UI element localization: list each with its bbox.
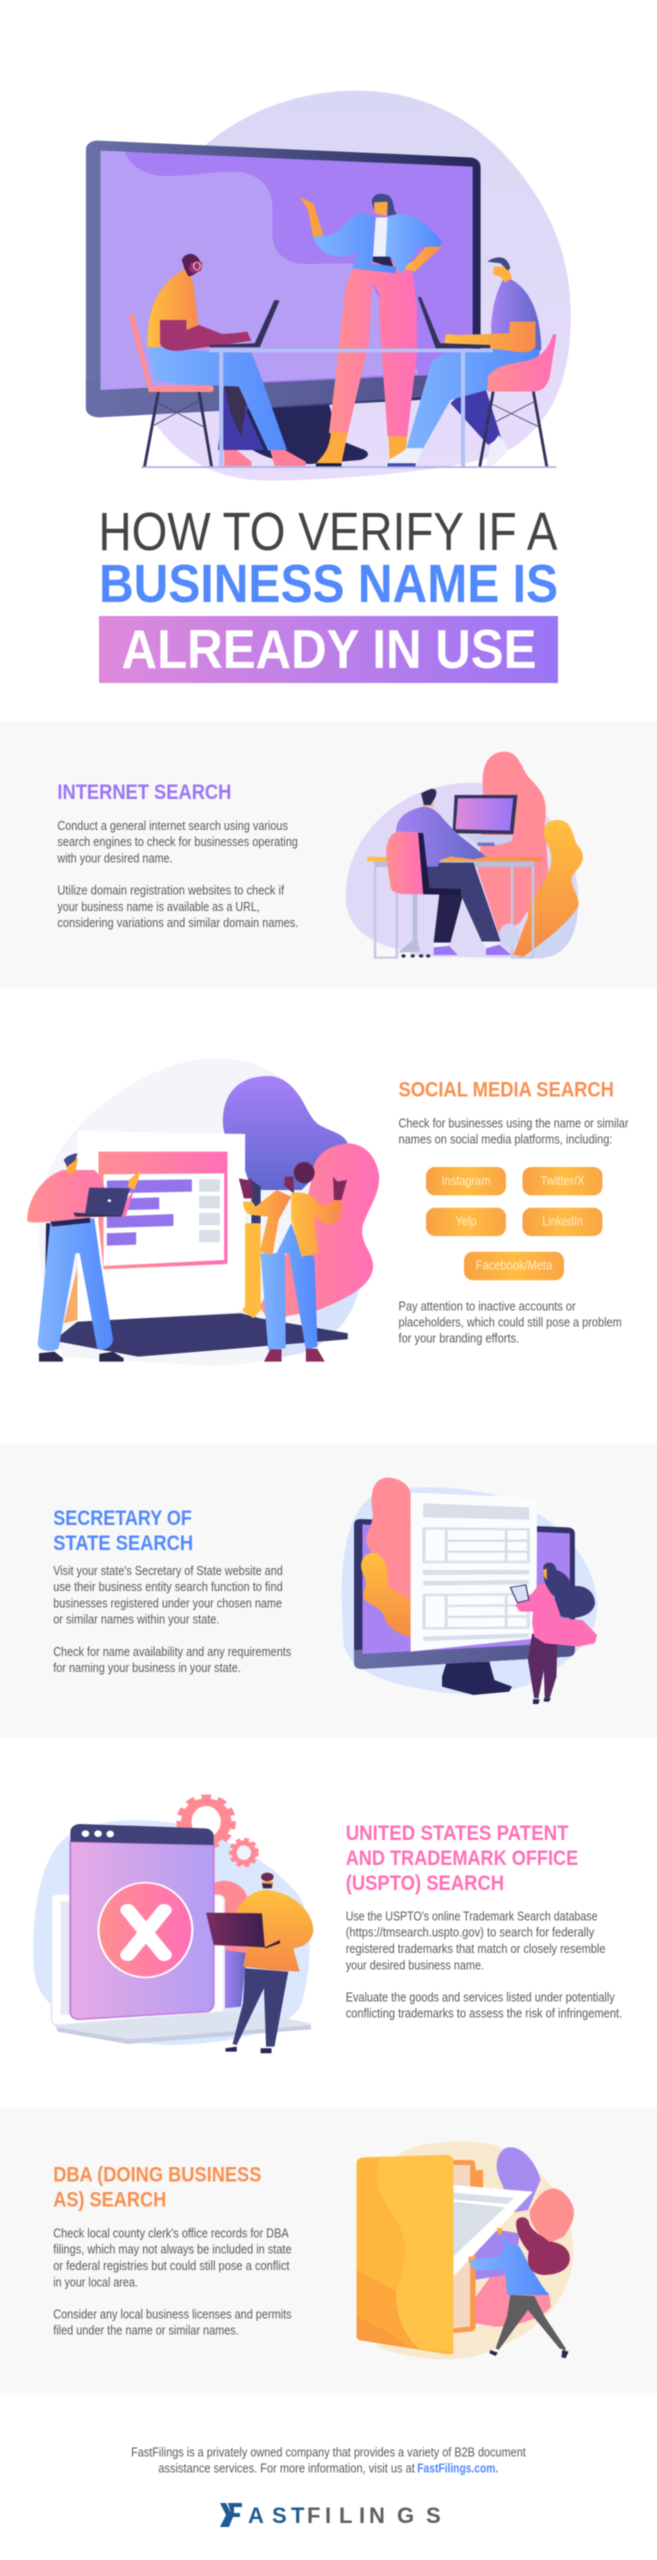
illustration: woman reviewing a form on a monitor	[341, 1478, 597, 1704]
footer text	[131, 2445, 526, 2476]
title line 3: ALREADY IN USE	[122, 618, 536, 680]
hero illustration: team meeting in front of a monitor	[86, 91, 571, 481]
button: Yelp	[426, 1208, 506, 1236]
heading: uspto search	[346, 1822, 578, 1895]
panel: uspto search	[33, 1797, 622, 2053]
panel background	[0, 722, 657, 989]
body text: secretary of state: use their business entity search function to find	[53, 1579, 283, 1594]
body text: uspto: registered trademarks that match or closely resemble	[346, 1941, 606, 1956]
body text: uspto: (https://tmsearch.uspto.gov) to search for federally	[346, 1925, 595, 1940]
button: Twitter/X	[522, 1167, 602, 1195]
body text: secretary of state: businesses registered under your chosen name	[53, 1595, 282, 1610]
illustration: man with laptop and rejected browser window	[33, 1797, 313, 2053]
background blob	[126, 91, 571, 481]
body text: internet search	[57, 818, 298, 930]
body text: social media intro: names on social media platforms, including:	[398, 1131, 612, 1146]
footer link: FastFilings.com.	[417, 2461, 498, 2476]
footer text: FastFilings is a privately owned company that provides a variety of B2B document	[131, 2445, 526, 2460]
button: Instagram	[426, 1167, 506, 1195]
body text: social media note: for your branding efforts.	[398, 1331, 519, 1346]
heading: social media search: SOCIAL MEDIA SEARCH	[398, 1079, 614, 1102]
table and floor	[141, 349, 556, 468]
heading: uspto search: (USPTO) SEARCH	[346, 1872, 504, 1895]
panel: dba search	[0, 2108, 657, 2393]
body text: secretary of state	[53, 1563, 292, 1675]
title line 1: HOW TO VERIFY IF A	[98, 502, 558, 562]
panel: social media search	[27, 1058, 629, 1366]
body text: secretary of state: Check for name availability and any requirements	[53, 1644, 292, 1659]
body text: uspto: Evaluate the goods and services listed under potentially	[346, 1990, 615, 2005]
footer text: assistance services. For more information, visit us at	[158, 2461, 415, 2476]
body text: dba: or federal registries but could still pose a conflict	[53, 2258, 290, 2273]
button: Instagram: Instagram	[442, 1173, 490, 1188]
panel: internet search	[0, 722, 657, 989]
title line 2: BUSINESS NAME IS	[99, 554, 558, 614]
body text: social media note	[398, 1298, 622, 1346]
button: Yelp: Yelp	[456, 1214, 476, 1229]
button: LinkedIn	[522, 1208, 602, 1236]
body text: internet search: Utilize domain registration websites to check if	[57, 883, 284, 898]
title banner	[99, 616, 558, 683]
heading: dba search: AS) SEARCH	[53, 2189, 166, 2212]
heading: secretary of state search	[53, 1507, 193, 1555]
body text: internet search: considering variations and similar domain names.	[57, 915, 298, 930]
body text: dba: filings, which may not always be included in state	[53, 2242, 292, 2257]
body text: dba	[53, 2225, 292, 2338]
body text: secretary of state: or similar names within your state.	[53, 1612, 220, 1627]
panel background	[0, 2108, 657, 2393]
heading: dba search	[53, 2164, 261, 2212]
logo wordmark: AST	[248, 2503, 305, 2528]
heading: secretary of state search: SECRETARY OF	[53, 1507, 192, 1530]
body text: social media note: placeholders, which could still pose a problem	[398, 1315, 622, 1330]
heading: secretary of state search: STATE SEARCH	[53, 1532, 193, 1555]
body text: secretary of state: Visit your state's Secretary of State website and	[53, 1563, 283, 1578]
body text: dba: Consider any local business licenses and permits	[53, 2306, 292, 2321]
body text: uspto: Use the USPTO's online Trademark Search database	[346, 1908, 598, 1923]
logo wordmark: FILINGS	[307, 2503, 441, 2528]
body text: internet search: with your desired name.	[57, 850, 173, 865]
body text: social media note: Pay attention to inactive accounts or	[398, 1298, 576, 1313]
button: Twitter/X: Twitter/X	[540, 1173, 585, 1188]
illustration: presenting with a laptop	[27, 1058, 379, 1366]
right man with laptop	[406, 257, 556, 467]
body text: secretary of state: for naming your business in your state.	[53, 1660, 241, 1675]
illustration: person at desktop computer	[346, 752, 583, 958]
illustration: woman pulling a document from a folder	[357, 2141, 574, 2359]
heading: uspto search: UNITED STATES PATENT	[346, 1822, 569, 1845]
left man with laptop	[129, 254, 306, 467]
body text: social media intro	[398, 1115, 629, 1146]
title	[98, 502, 558, 683]
body text: internet search: search engines to check for businesses operating	[57, 834, 298, 849]
body text: uspto	[346, 1908, 622, 2021]
body text: dba: Check local county clerk's office records for DBA	[53, 2225, 289, 2240]
panel: secretary of state search	[0, 1443, 657, 1738]
logo: FastFilings	[220, 2503, 441, 2528]
body text: uspto: your desired business name.	[346, 1957, 484, 1972]
body text: dba: filed under the name or similar names.	[53, 2323, 239, 2338]
body text: internet search: your business name is available as a URL,	[57, 899, 260, 914]
monitor	[86, 141, 481, 464]
body text: dba: in your local area.	[53, 2274, 138, 2289]
body text: internet search: Conduct a general internet search using various	[57, 818, 288, 833]
standing woman presenting	[300, 194, 442, 467]
button: Facebook/Meta: Facebook/Meta	[476, 1257, 553, 1272]
logo mark	[220, 2503, 242, 2527]
button: LinkedIn: LinkedIn	[542, 1214, 583, 1229]
heading: uspto search: AND TRADEMARK OFFICE	[346, 1847, 578, 1870]
button: Facebook/Meta	[464, 1252, 564, 1280]
heading: internet search: INTERNET SEARCH	[57, 781, 231, 804]
panel background	[0, 1443, 657, 1738]
heading: dba search: DBA (DOING BUSINESS	[53, 2164, 261, 2187]
